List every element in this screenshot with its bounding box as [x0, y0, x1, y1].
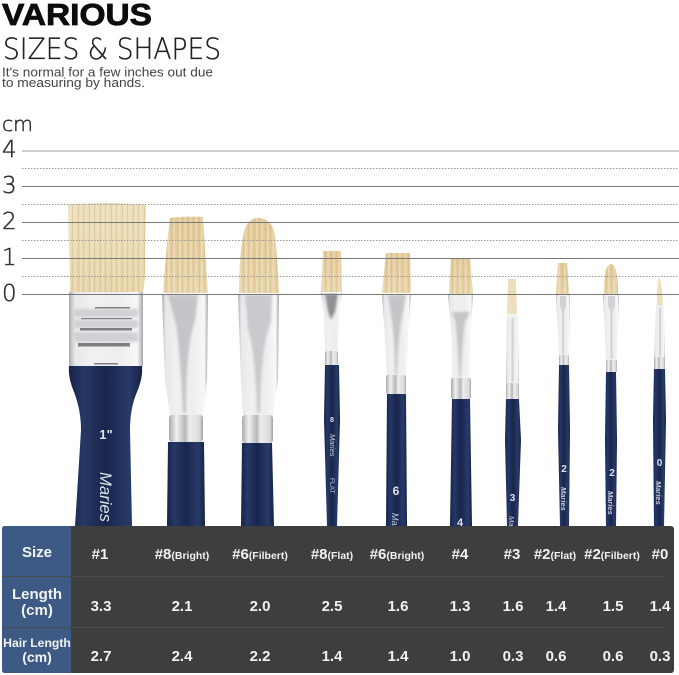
row: hair length: 2.2: [250, 648, 270, 665]
brush: #1: 1": [99, 427, 113, 442]
row: size: #2(Filbert): [584, 546, 640, 563]
brush: #2 filbert: 2: [609, 468, 615, 479]
row: length: [91, 598, 671, 615]
row: hair length: 1.0: [450, 648, 470, 665]
brush: #8 flat: 8: [330, 417, 334, 424]
note text: to measuring by hands.: [2, 76, 145, 90]
brush: #4: [448, 259, 473, 529]
table: [2, 526, 674, 673]
brush: #8 flat: Maries: [328, 434, 337, 457]
row: size: #8(Flat): [311, 546, 353, 563]
brush: #3: 3: [510, 493, 516, 504]
row: length: 1.3: [450, 598, 470, 615]
row: length: 2.0: [250, 598, 270, 615]
ruler: 3: [2, 173, 17, 199]
table header column: Size: [22, 544, 52, 561]
ruler: 0: [2, 281, 17, 307]
row: length: 1.5: [603, 598, 623, 615]
row: length: 2.5: [322, 598, 342, 615]
brush: #6 bright: Maries: [390, 513, 400, 541]
table header column: [2, 526, 71, 673]
table header column: Hair Length: [3, 636, 71, 650]
row: size: #2(Flat): [534, 546, 576, 563]
ruler: [2, 112, 679, 307]
row: size: #6(Filbert): [232, 546, 288, 563]
row: size: [92, 546, 668, 563]
brush: #2 flat: [556, 263, 570, 526]
brush: #0: Maries: [654, 481, 663, 505]
row: hair length: 1.4: [388, 648, 409, 665]
row: hair length: 0.3: [503, 648, 523, 665]
row: hair length: 0.3: [650, 648, 670, 665]
row: length: 1.4: [546, 598, 567, 615]
row: size: #6(Bright): [370, 546, 424, 563]
brush: #0: [653, 277, 666, 526]
row: size: #8(Bright): [155, 546, 209, 563]
brush: #2 filbert: [603, 264, 619, 526]
heading: sizes and shapes: SIZES & SHAPES: [3, 32, 221, 66]
table header column: (cm): [22, 649, 52, 665]
brush: #8 flat: FLAT: [328, 478, 335, 493]
row: size: #0: [652, 546, 668, 563]
ruler: cm: [2, 112, 33, 136]
note text: [2, 66, 213, 90]
row: hair length: 0.6: [546, 648, 566, 665]
row: length: 1.6: [503, 598, 523, 615]
row: length: 1.4: [650, 598, 671, 615]
row: size: #4: [452, 546, 469, 563]
brush: #3: Maries: [507, 516, 516, 539]
brush: #2 flat: Maries: [559, 487, 568, 511]
brush: #8 bright: [162, 217, 208, 526]
brush: #2 flat: 2: [561, 464, 567, 475]
brush: #0: 0: [657, 458, 663, 469]
brush: #6 bright: [382, 253, 411, 541]
row: hair length: [91, 648, 670, 665]
ruler: 1: [2, 245, 17, 271]
brush: #6 filbert: [238, 218, 279, 526]
row: length: 2.1: [172, 598, 192, 615]
row: hair length: 1.4: [322, 648, 343, 665]
brush: #6 bright: 6: [393, 484, 400, 498]
ruler: 2: [2, 209, 17, 235]
brush: #1: Maries: [96, 472, 115, 522]
brush: #4: 4: [457, 517, 464, 529]
row: length: 3.3: [91, 598, 111, 615]
brush: #3: [505, 279, 521, 539]
note text: It's normal for a few inches out due: [2, 66, 213, 80]
row: hair length: 2.4: [172, 648, 193, 665]
table header column: Length: [12, 586, 62, 603]
row: size: #3: [504, 546, 520, 563]
row: hair length: 0.6: [603, 648, 623, 665]
row: length: 1.6: [388, 598, 408, 615]
table header column: (cm): [21, 602, 53, 619]
ruler: 4: [2, 137, 17, 163]
brush: #1: [68, 203, 146, 526]
row: hair length: 2.7: [91, 648, 111, 665]
brush: #2 filbert: Maries: [606, 491, 615, 515]
brush: #8 flat: [321, 251, 342, 526]
row: size: #1: [92, 546, 108, 563]
